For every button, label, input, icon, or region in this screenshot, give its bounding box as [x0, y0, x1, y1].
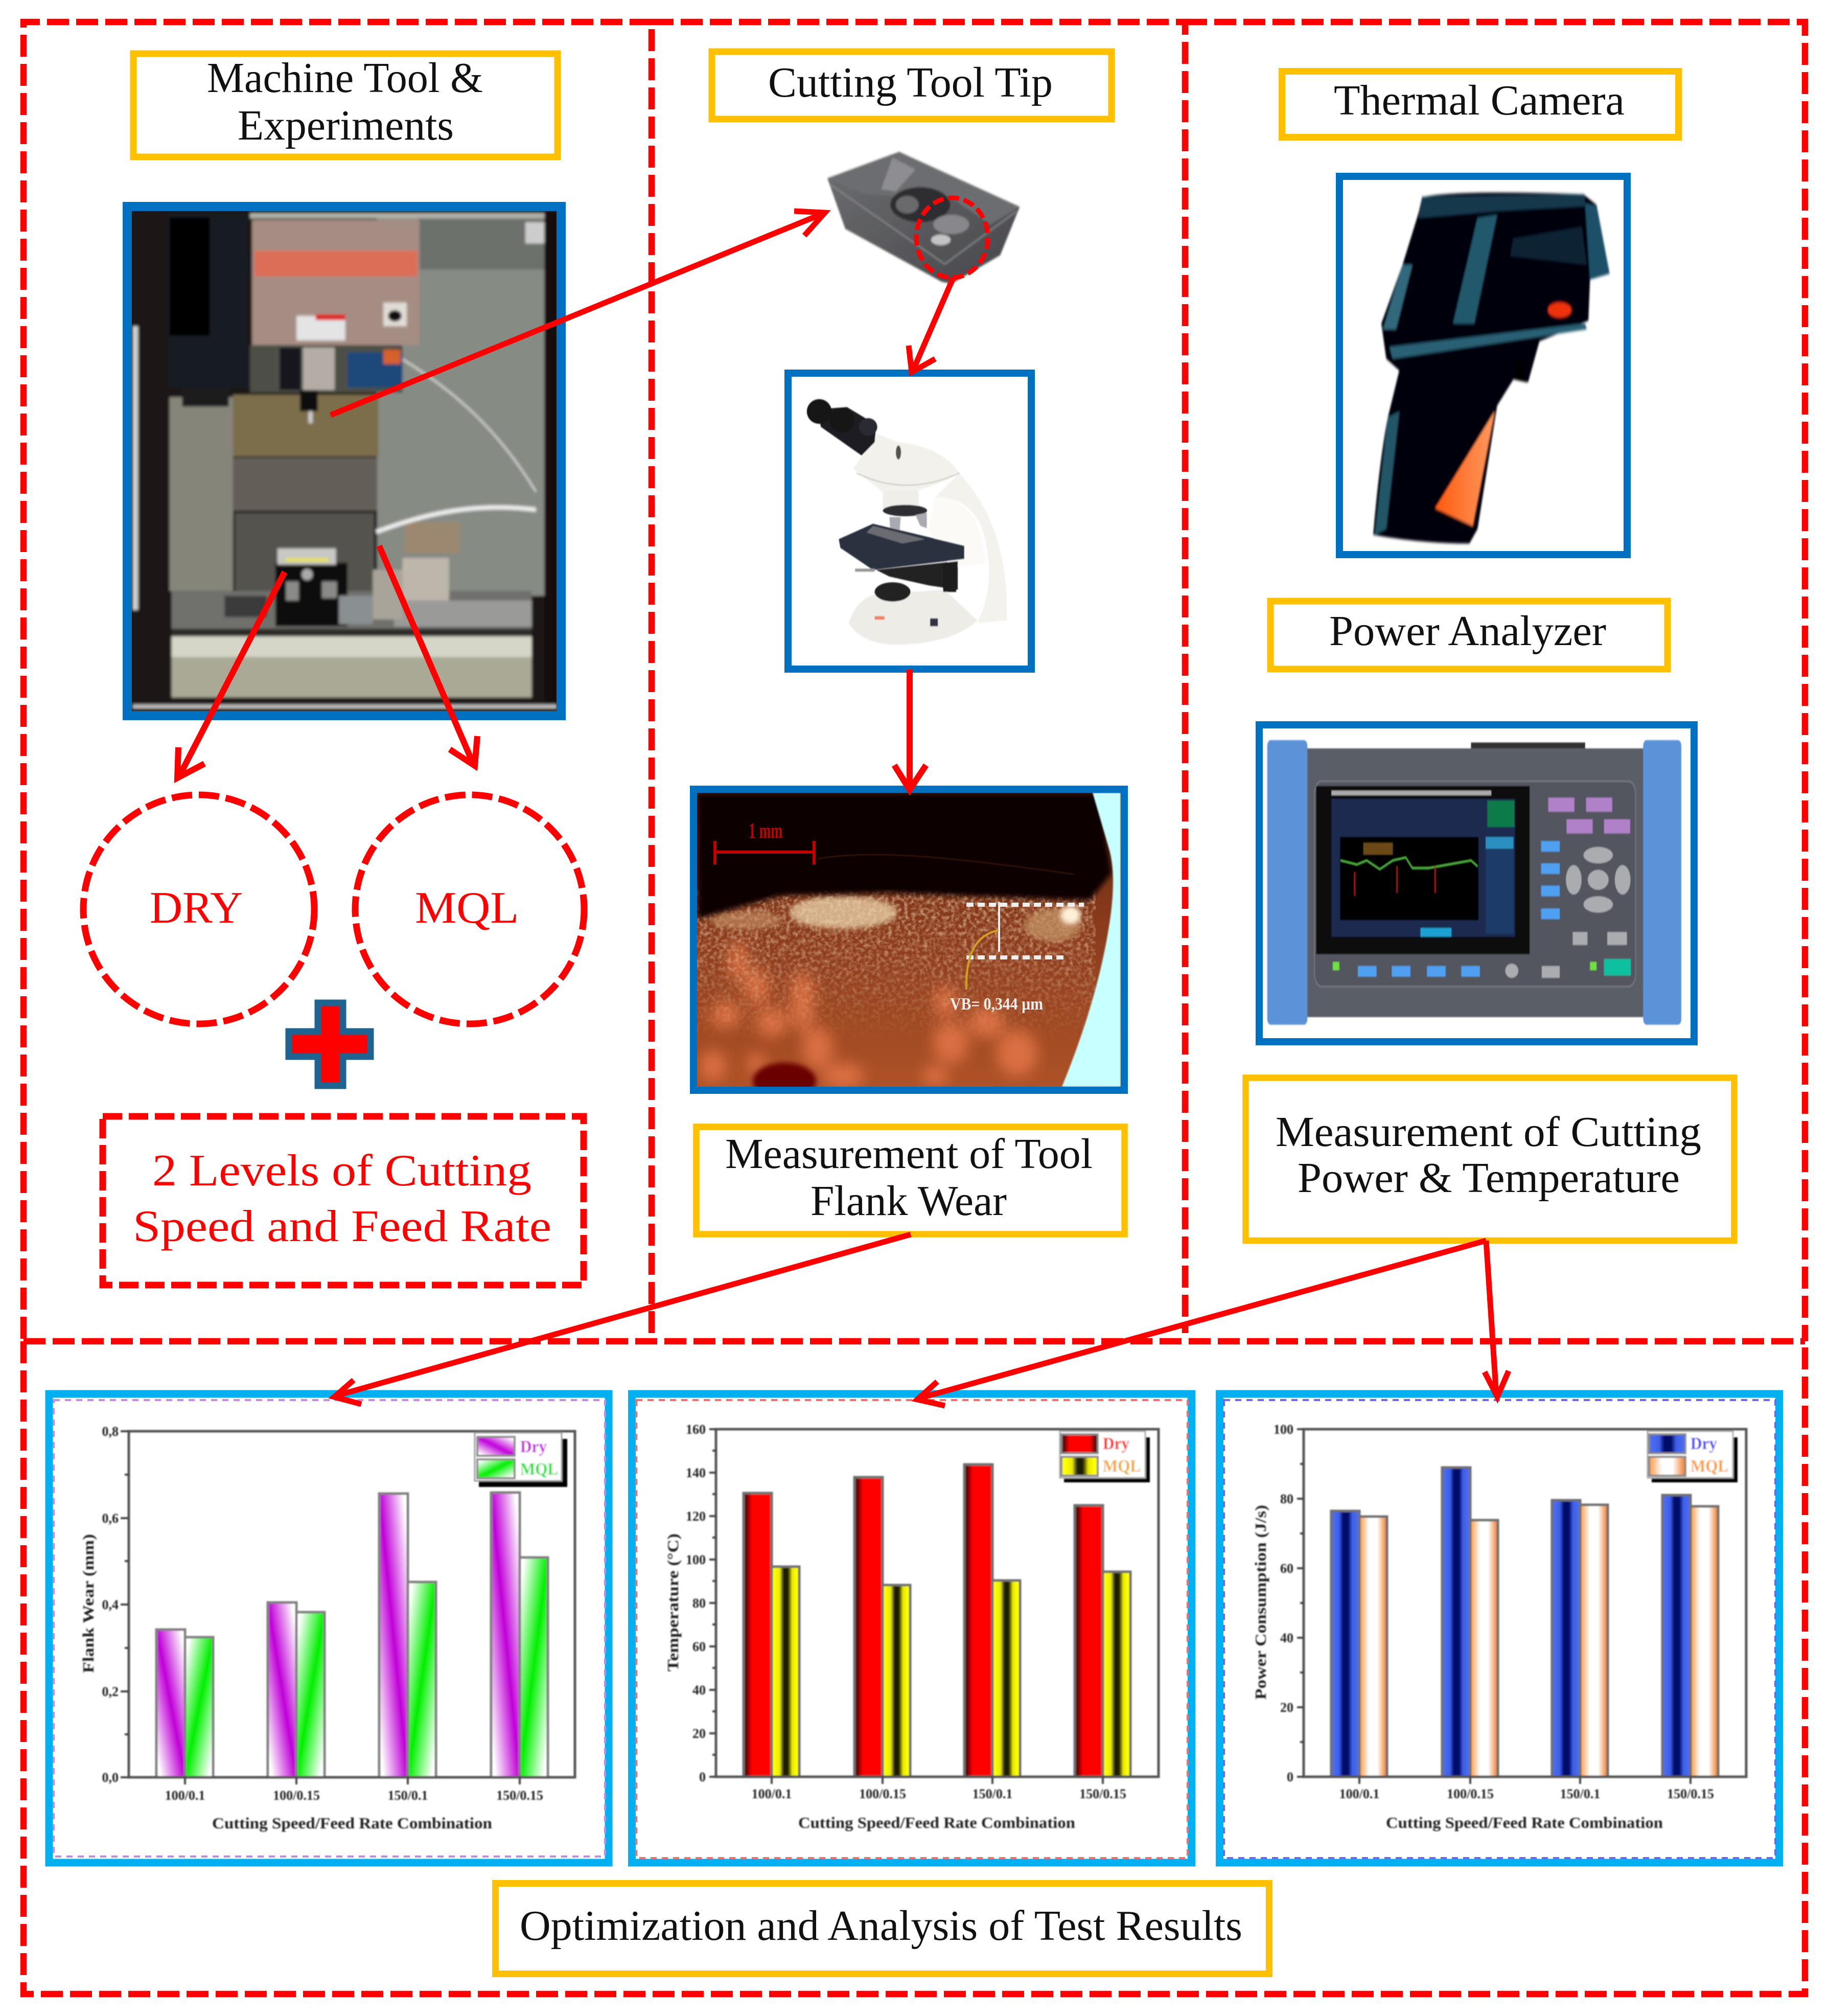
- bar chart: flank wear: 100/0.15: [273, 1788, 320, 1803]
- bar chart: flank wear: 100/0.1: [165, 1788, 205, 1803]
- bar chart: flank wear: [79, 1424, 575, 1832]
- icon: plus sign: [289, 1003, 371, 1086]
- heading: measurement of cutting power and temperature: Measurement of Cutting: [1276, 1108, 1701, 1156]
- photo: microscope: [788, 373, 1031, 669]
- bar chart: flank wear: 0,8: [102, 1424, 119, 1439]
- bar chart: temperature: 60: [692, 1639, 706, 1654]
- callout: cutting speed and feed rate levels: [103, 1116, 584, 1285]
- arrow: machine to MQL condition: [379, 546, 477, 766]
- arrow: machine spindle to cutting tool: [331, 211, 825, 415]
- chart panel: flank wear: [49, 1394, 609, 1863]
- bar chart: flank wear: 150/0.15: [496, 1788, 543, 1803]
- heading: measurement of tool flank wear: [696, 1127, 1124, 1234]
- heading: power analyzer: Power Analyzer: [1329, 607, 1606, 655]
- panel: cutting tool and flank wear measurement: [652, 22, 1185, 1333]
- bar chart: temperature: 160: [686, 1422, 706, 1437]
- bar chart: temperature: Cutting Speed/Feed Rate Combination: [798, 1814, 1075, 1831]
- bar chart: temperature: 100/0.1: [752, 1786, 792, 1801]
- bar chart: temperature: [664, 1422, 1159, 1831]
- bar chart: power consumption: 40: [1280, 1631, 1293, 1645]
- scale bar: 1 mm: [715, 819, 814, 864]
- heading: optimization and analysis of test results: Optimization and Analysis of Test Results: [520, 1902, 1242, 1950]
- bar chart: flank wear: 0,2: [102, 1684, 119, 1699]
- bar chart: power consumption: 150/0.15: [1667, 1786, 1714, 1801]
- bar chart: flank wear: 0,0: [102, 1770, 119, 1785]
- arrow: power and temperature measurement to temperature chart: [917, 1241, 1486, 1406]
- arrow: microscope to micrograph: [894, 670, 926, 790]
- heading: thermal camera: Thermal Camera: [1334, 77, 1625, 124]
- bar chart: flank wear: Flank Wear (mm): [79, 1534, 97, 1673]
- arrow: power and temperature measurement to power chart: [1485, 1241, 1509, 1397]
- bar chart: power consumption: 0: [1287, 1770, 1293, 1784]
- bar chart: temperature: 150/0.1: [973, 1786, 1012, 1801]
- bar chart: flank wear: Cutting Speed/Feed Rate Combination: [212, 1814, 492, 1832]
- bar chart: power consumption: 100: [1274, 1422, 1293, 1437]
- bar chart: temperature: 140: [686, 1465, 706, 1480]
- bar chart: temperature: 100/0.15: [859, 1786, 906, 1801]
- heading: thermal camera: [1282, 72, 1678, 137]
- bar chart: temperature: 120: [686, 1509, 706, 1524]
- photo: power analyzer: [1259, 725, 1694, 1042]
- photo: cutting tool insert: [827, 152, 1020, 284]
- bar chart: flank wear: 0,6: [102, 1511, 119, 1526]
- bar chart: power consumption: 60: [1280, 1561, 1293, 1576]
- arrow: machine to dry condition: [177, 572, 285, 778]
- bar chart: power consumption: 100/0.15: [1447, 1786, 1494, 1801]
- arrow: cutting tool to microscope: [909, 278, 953, 372]
- legend: dry and MQL: Dry: [520, 1437, 547, 1456]
- heading: machine tool and experiments: Experiments: [238, 102, 454, 149]
- legend: dry and MQL: [1060, 1431, 1150, 1482]
- bar chart: temperature: 80: [692, 1596, 706, 1611]
- photo: CNC machine tool: [127, 207, 561, 716]
- arrow: flank wear measurement to flank wear chart: [334, 1234, 911, 1404]
- panel: measuring instruments: [1185, 22, 1805, 1341]
- scale bar: 1 mm: 1 mm: [749, 819, 782, 843]
- heading: cutting tool tip: Cutting Tool Tip: [768, 59, 1053, 106]
- bar chart: power consumption: Power Consumption (J/s): [1252, 1505, 1269, 1700]
- bar chart: power consumption: 100/0.1: [1339, 1786, 1379, 1801]
- bar chart: power consumption: [1252, 1422, 1746, 1831]
- bar chart: temperature: 40: [692, 1683, 706, 1698]
- bar chart: temperature: 100: [686, 1552, 706, 1567]
- legend: dry and MQL: [475, 1433, 567, 1487]
- legend: dry and MQL: MQL: [1103, 1457, 1141, 1476]
- legend: dry and MQL: MQL: [520, 1460, 558, 1479]
- heading: measurement of tool flank wear: Measurement of Tool: [725, 1130, 1093, 1178]
- heading: measurement of cutting power and temperature: Power & Temperature: [1298, 1154, 1680, 1202]
- callout: cutting speed and feed rate levels: 2 Levels of Cutting: [152, 1146, 531, 1196]
- bar chart: temperature: 0: [699, 1770, 706, 1784]
- circle: MQL: [355, 795, 584, 1024]
- bar chart: power consumption: Cutting Speed/Feed Rate Combination: [1386, 1814, 1663, 1831]
- photo: thermal camera: [1339, 176, 1627, 555]
- legend: dry and MQL: [1648, 1431, 1738, 1482]
- circle: DRY: DRY: [150, 883, 243, 933]
- legend: dry and MQL: MQL: [1691, 1457, 1728, 1476]
- marker: dashed circle on cutting edge: [916, 198, 988, 278]
- bar chart: power consumption: 150/0.1: [1560, 1786, 1600, 1801]
- heading: optimization and analysis of test results: [496, 1883, 1269, 1974]
- bar chart: power consumption: 80: [1280, 1492, 1293, 1506]
- heading: machine tool and experiments: [133, 54, 558, 157]
- legend: dry and MQL: Dry: [1691, 1434, 1717, 1453]
- chart panel: temperature: [632, 1394, 1192, 1863]
- bar chart: power consumption: 20: [1280, 1700, 1293, 1715]
- heading: machine tool and experiments: Machine Tool &: [207, 54, 483, 102]
- heading: measurement of tool flank wear: Flank Wear: [811, 1177, 1007, 1225]
- heading: measurement of cutting power and temperature: [1246, 1078, 1734, 1241]
- panel: machine tool and experiments: [24, 22, 652, 1341]
- bar chart: temperature: 20: [692, 1726, 706, 1741]
- image detail: lighter blotches: [700, 941, 1037, 1089]
- bar chart: flank wear: 0,4: [102, 1597, 119, 1612]
- photo: tool flank wear micrograph: [693, 789, 1124, 1099]
- bar chart: temperature: 150/0.15: [1079, 1786, 1126, 1801]
- circle: DRY: [83, 795, 314, 1024]
- chart panel: power consumption: [1219, 1394, 1779, 1863]
- bar chart: temperature: Temperature (°C): [664, 1533, 682, 1671]
- heading: power analyzer: [1270, 601, 1668, 669]
- legend: dry and MQL: Dry: [1103, 1434, 1129, 1453]
- heading: cutting tool tip: [712, 52, 1112, 119]
- annotation: flank wear measurement: [950, 902, 1084, 1014]
- annotation: flank wear measurement: VB= 0,344 µm: [950, 995, 1043, 1014]
- panel: optimization and analysis of test results: [24, 1341, 1805, 1994]
- callout: cutting speed and feed rate levels: Speed and Feed Rate: [133, 1202, 551, 1251]
- circle: MQL: MQL: [415, 883, 519, 933]
- bar chart: flank wear: 150/0.1: [388, 1788, 428, 1803]
